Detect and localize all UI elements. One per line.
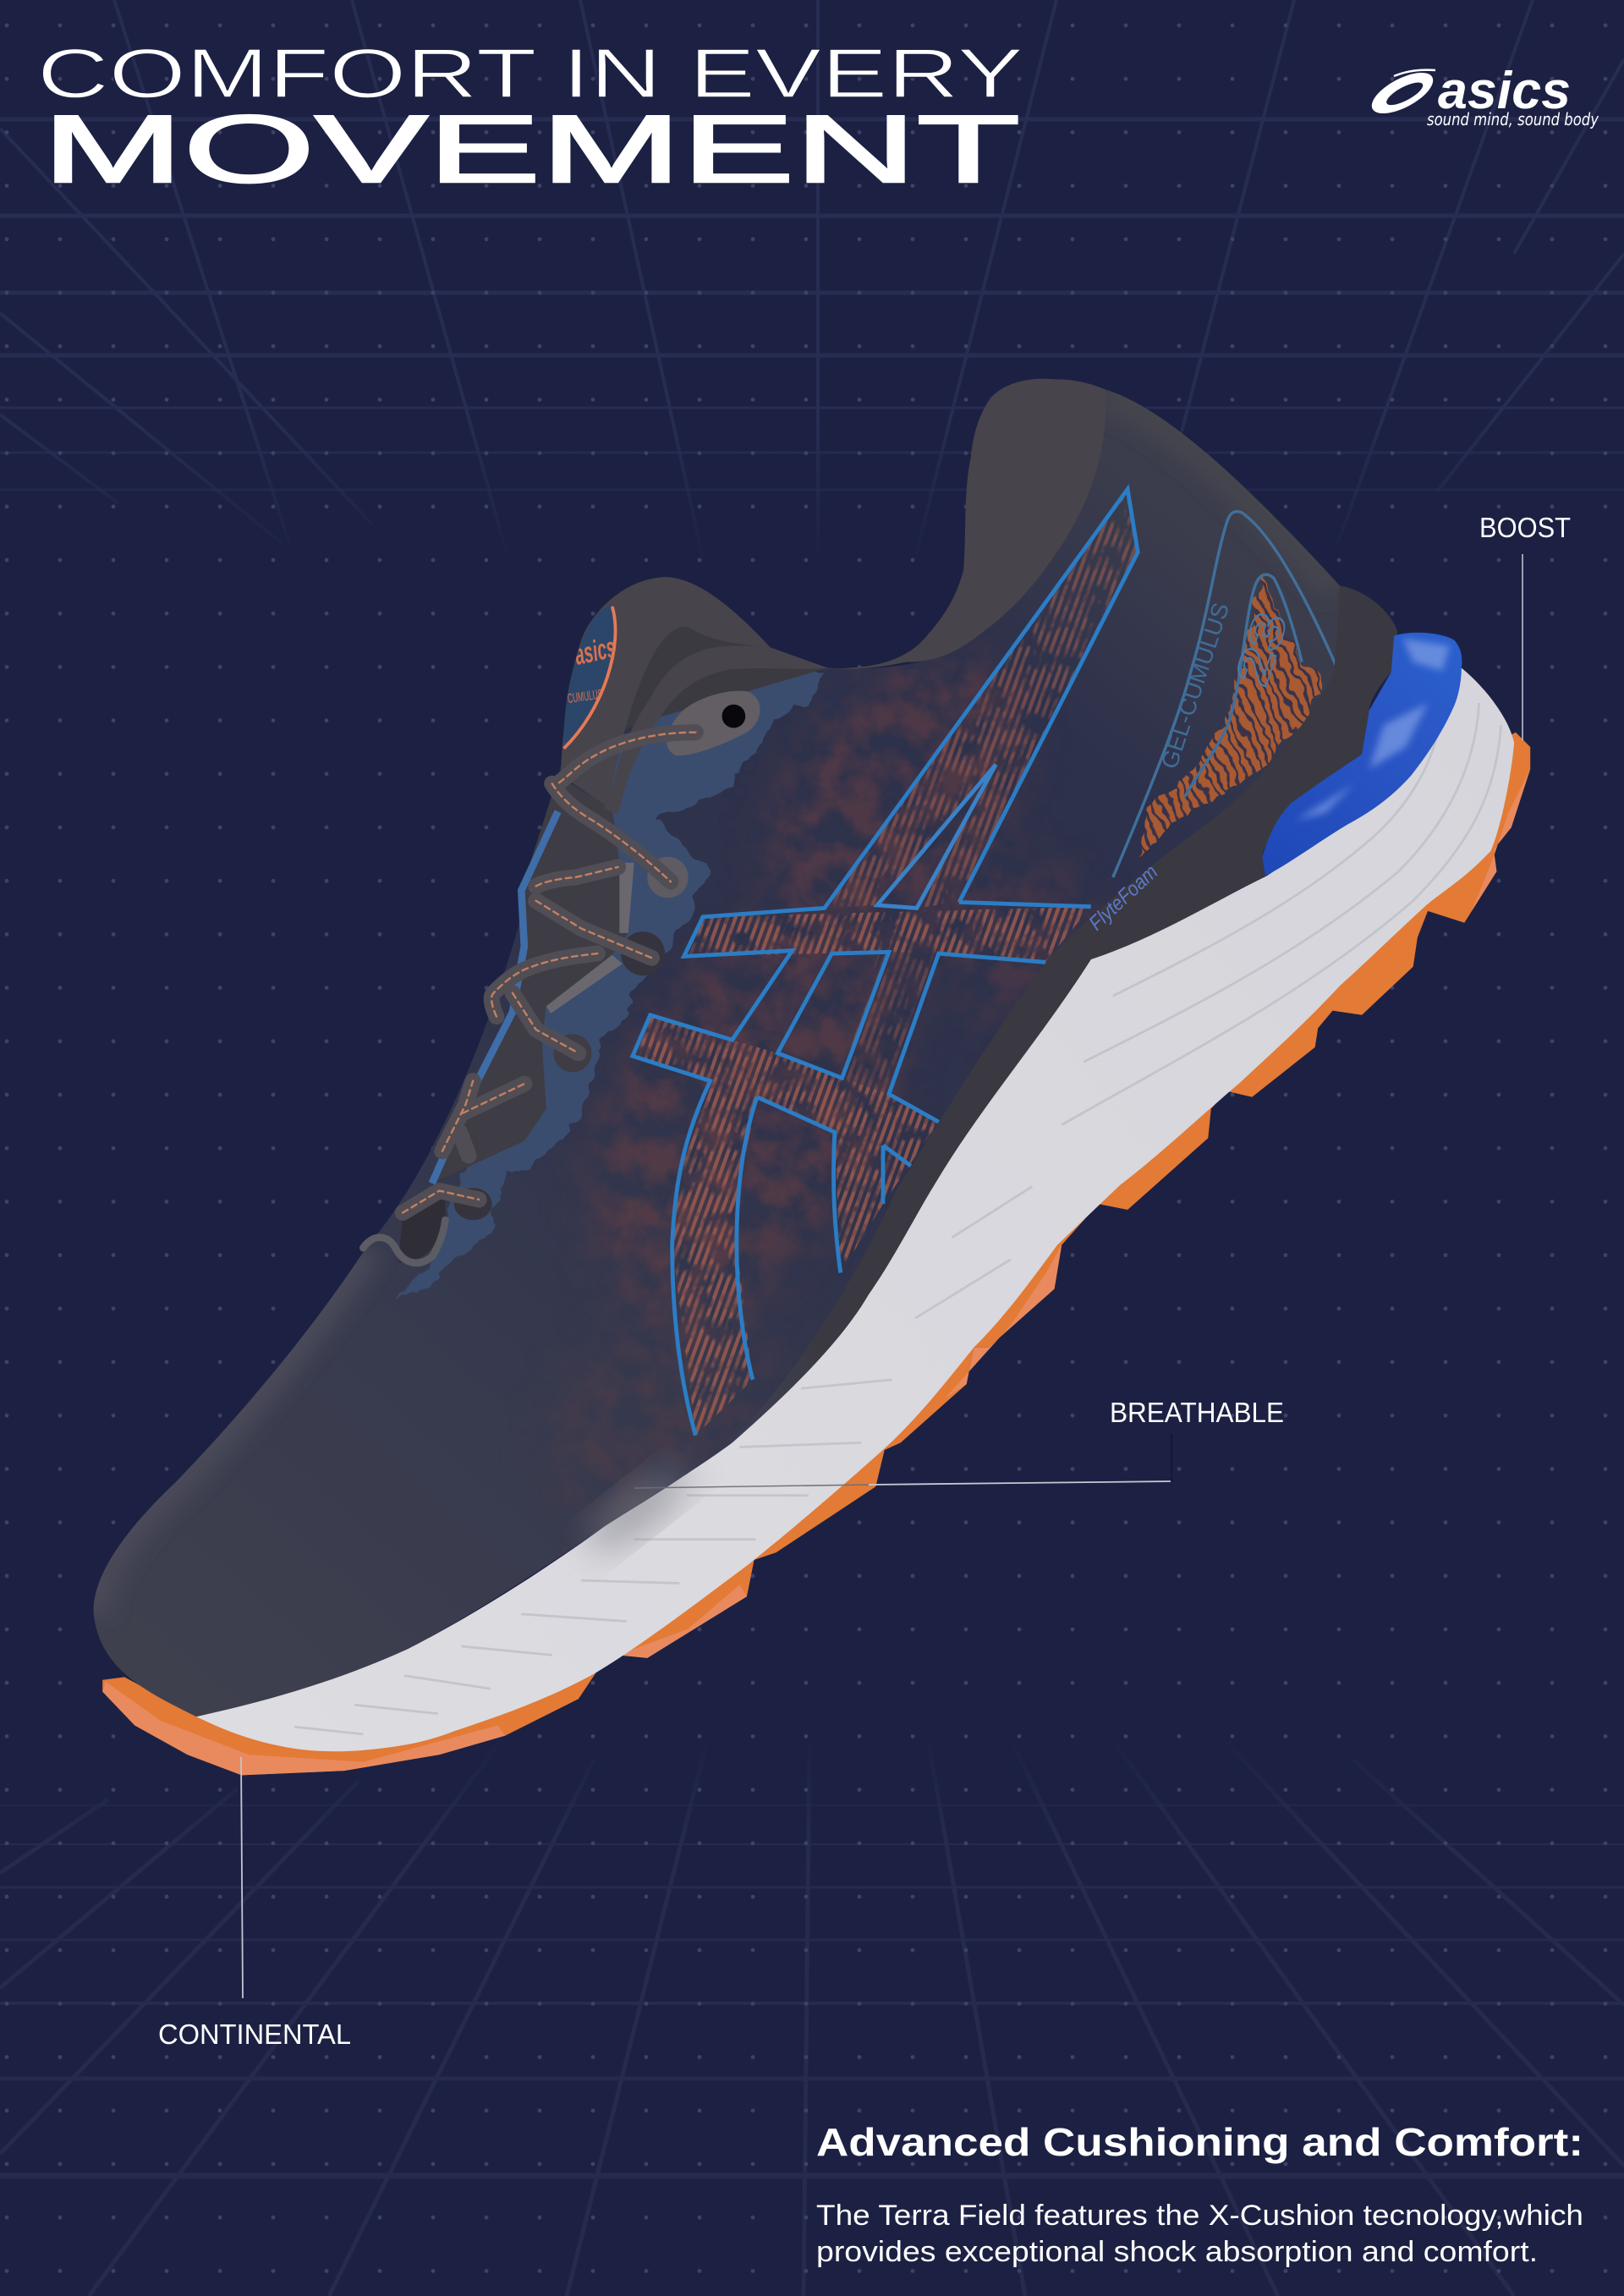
midsole	[196, 667, 1514, 1751]
toe edge highlight	[94, 1248, 366, 1614]
top perspective grid	[0, 0, 1624, 563]
collar lining	[767, 379, 1106, 669]
outsole	[102, 733, 1530, 1775]
body line 2: provides exceptional shock absorption and comfort.	[816, 2236, 1538, 2268]
midsole grooves	[294, 703, 1501, 1734]
heel edge shade	[1106, 390, 1340, 586]
blue wave pattern	[397, 673, 827, 1304]
midfoot brand text: FlyteFoam	[1084, 860, 1162, 935]
toe to midsole blend	[576, 1454, 698, 1563]
upper body	[94, 390, 1340, 1717]
upper red mottling	[558, 650, 1098, 1492]
breathable label: BREATHABLE	[1110, 1397, 1284, 1428]
heel orange print	[1141, 575, 1327, 857]
text block: advanced cushioning	[816, 2120, 1583, 2268]
icon: asics stripes	[1366, 64, 1439, 122]
boost leader line	[1522, 554, 1523, 740]
gray lace loops	[546, 863, 634, 1013]
laces	[403, 733, 695, 1213]
tongue label	[563, 606, 618, 749]
boost label: BOOST	[1479, 512, 1571, 543]
bottom perspective grid	[0, 1736, 1624, 2296]
gel cushion	[1262, 633, 1462, 876]
title line 1: COMFORT IN EVERY	[37, 34, 1023, 113]
shoe	[94, 379, 1530, 1775]
tongue inner	[432, 777, 628, 1184]
wordmark: asics	[1438, 62, 1571, 120]
tongue label: asics	[572, 632, 618, 672]
tongue	[432, 577, 771, 1184]
logo: asics	[1366, 62, 1599, 129]
toe eyelet loop	[363, 1194, 445, 1263]
tongue base	[561, 577, 827, 807]
model number: 23	[1225, 606, 1298, 691]
callout: breathable	[634, 1397, 1284, 1488]
breathable leader line	[634, 1434, 1171, 1488]
body line 1: The Terra Field features the X-Cushion tecnology,which	[816, 2200, 1583, 2232]
heel badge lines	[1113, 512, 1337, 877]
tongue label: CUMULUS	[567, 687, 603, 706]
foxing and heel panel	[615, 586, 1397, 1516]
heading: Advanced Cushioning and Comfort:	[816, 2120, 1583, 2164]
asics stripes outline	[633, 489, 1138, 1436]
continental label: CONTINENTAL	[158, 2019, 351, 2050]
eyelets	[363, 691, 760, 1263]
continental leader line	[241, 1757, 243, 1998]
stripe hatching	[633, 489, 1138, 1436]
eyestay collar band	[603, 645, 827, 815]
model name: GEL-CUMULUS	[1155, 600, 1234, 772]
eyestay edge	[432, 811, 558, 1184]
title	[37, 34, 1023, 202]
title line 2: MOVEMENT	[42, 96, 1020, 202]
